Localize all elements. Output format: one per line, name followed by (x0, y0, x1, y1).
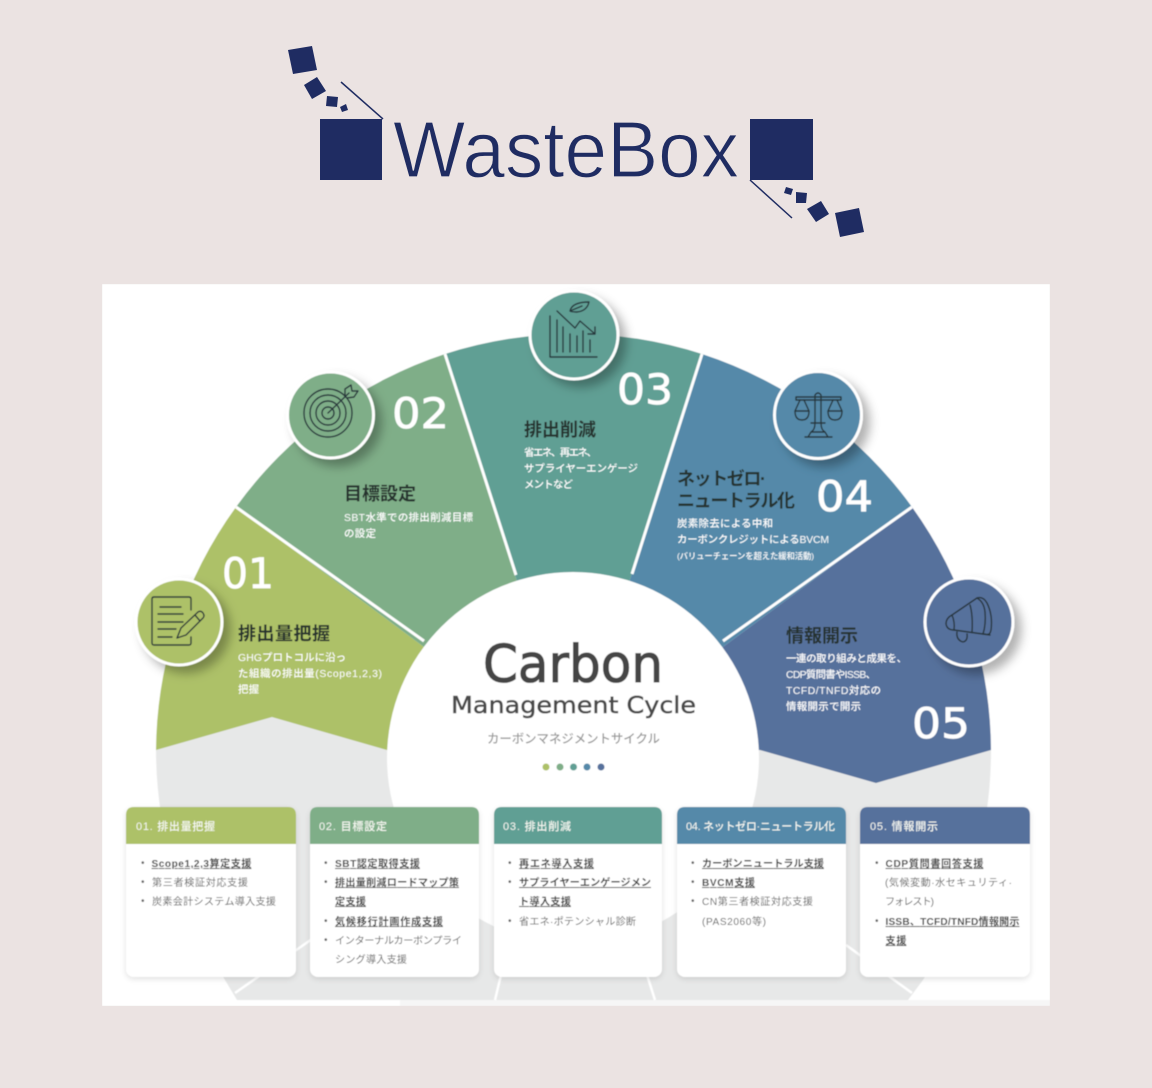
card 02: • (324, 935, 328, 946)
text block 01 (222, 549, 382, 696)
card 01: 炭素会計システム導入支援 (152, 895, 276, 908)
card 04: カーボンニュートラル支援 (702, 857, 824, 870)
text block 04 (677, 468, 873, 561)
text block 01: た組織の排出量(Scope1,2,3) (238, 667, 382, 680)
card 02: 気候移行計画作成支援 (335, 915, 443, 928)
card 02: • (324, 858, 328, 869)
card 04: • (691, 858, 695, 869)
card 01: • (141, 858, 145, 869)
text block 03: 03 (617, 365, 673, 414)
card 02: 排出量削減ロードマップ策 (335, 876, 459, 889)
progress dots (542, 764, 604, 770)
card 04 (677, 807, 846, 977)
text block 01: 排出量把握 (238, 624, 330, 644)
card 02: シング導入支援 (335, 953, 407, 966)
card 03 (494, 807, 662, 977)
icon: document and pencil (136, 579, 222, 665)
logo: WasteBox: WasteBox (393, 105, 739, 194)
text block 04: 04 (816, 472, 873, 521)
card 03: ト導入支援 (519, 895, 571, 908)
center title: Carbon (483, 635, 663, 695)
text block 05: 一連の取り組みと成果を、 (786, 652, 907, 665)
segment 05 (573, 507, 991, 783)
card 01: • (141, 877, 145, 888)
center title: カーボンマネジメントサイクル (487, 732, 660, 746)
card 01: • (141, 896, 145, 907)
card 03: • (508, 877, 512, 888)
text block 01: 01 (222, 549, 274, 598)
logo: WasteBox (288, 46, 864, 237)
card header 04 (677, 807, 846, 844)
card header 05 (860, 807, 1030, 844)
card header 02 (310, 807, 479, 844)
text block 01: 把握 (238, 683, 260, 696)
text block 04: (バリューチェーンを超えた緩和活動) (677, 551, 814, 561)
segment 02 (236, 354, 573, 758)
center title: Management Cycle (451, 693, 696, 719)
card 02: • (324, 916, 328, 927)
text block 05: CDP質問書やISSB、 (786, 668, 876, 681)
card 01: 01. 排出量把握 (136, 819, 215, 833)
text block 05 (786, 626, 970, 748)
card 05: 05. 情報開示 (870, 819, 938, 833)
card 04: • (691, 896, 695, 907)
card 05: CDP質問書回答支援 (886, 857, 984, 870)
text block 05: 05 (912, 699, 970, 748)
segment 04 (573, 354, 912, 758)
card 04: • (691, 877, 695, 888)
card 03: • (508, 858, 512, 869)
text block 05: 情報開示で開示 (786, 700, 861, 713)
segment 01 (156, 507, 573, 758)
card header 01 (126, 807, 296, 844)
text block 02 (344, 389, 474, 540)
card 05: • (875, 858, 879, 869)
card 02: 定支援 (335, 895, 366, 908)
card 05: (気候変動·水セキュリティ· (885, 876, 1012, 889)
card 05: フォレスト) (885, 897, 934, 908)
card 05: 支援 (886, 934, 906, 947)
text block 03: 排出削減 (524, 419, 596, 440)
icon: target and arrow (288, 372, 374, 458)
icon: falling chart and leaf (530, 291, 618, 379)
text block 03: 省エネ、再エネ、 (524, 446, 597, 459)
text block 03: メントなど (524, 479, 574, 491)
card 01: 第三者検証対応支援 (152, 876, 248, 889)
card 01 (126, 807, 296, 977)
panel: carbon management cycle (102, 284, 1050, 1006)
text block 01: GHGプロトコルに沿っ (238, 651, 346, 664)
card 04: 04. ネットゼロ·ニュートラル化 (686, 819, 835, 833)
text block 04: 炭素除去による中和 (677, 517, 773, 530)
text block 02: 目標設定 (344, 484, 416, 504)
icon: megaphone (925, 578, 1013, 666)
card 02: インターナルカーボンプライ (335, 935, 462, 947)
card 03: • (508, 916, 512, 927)
card 02: • (324, 877, 328, 888)
segment 03 (445, 334, 702, 758)
card header 03 (494, 807, 662, 844)
card 05: ISSB、TCFD/TNFD情報開示 (886, 915, 1020, 928)
card 03: 再エネ導入支援 (519, 857, 594, 870)
card 04: CN第三者検証対応支援 (702, 895, 813, 908)
card 03: 省エネ·ポテンシャル診断 (519, 915, 636, 928)
card 03: 03. 排出削減 (503, 819, 571, 833)
card 02: SBT認定取得支援 (335, 857, 420, 870)
text block 04: ニュートラル化 (677, 491, 795, 511)
card 02 (310, 807, 479, 977)
card 03: サプライヤーエンゲージメン (519, 876, 651, 889)
text block 05: TCFD/TNFD対応の (786, 684, 881, 697)
text block 04: カーボンクレジットによるBVCM (677, 534, 829, 546)
center circle (387, 572, 759, 944)
card 05 (860, 807, 1030, 977)
icon: balance scales (774, 372, 862, 458)
text block 03 (524, 365, 673, 491)
card 04: (PAS2060等) (702, 915, 766, 928)
text block 05: 情報開示 (786, 626, 858, 646)
text block 02: SBT水準での排出削減目標 (344, 511, 474, 524)
card 04: BVCM支援 (702, 876, 755, 889)
text block 02: 02 (392, 389, 449, 438)
card 02: 02. 目標設定 (319, 819, 387, 833)
text block 03: サプライヤーエンゲージ (524, 462, 638, 475)
center title (451, 635, 696, 746)
text block 02: の設定 (344, 528, 376, 540)
card 01: Scope1,2,3算定支援 (152, 857, 252, 870)
card 05: • (875, 916, 879, 927)
text block 04: ネットゼロ· (677, 468, 766, 489)
